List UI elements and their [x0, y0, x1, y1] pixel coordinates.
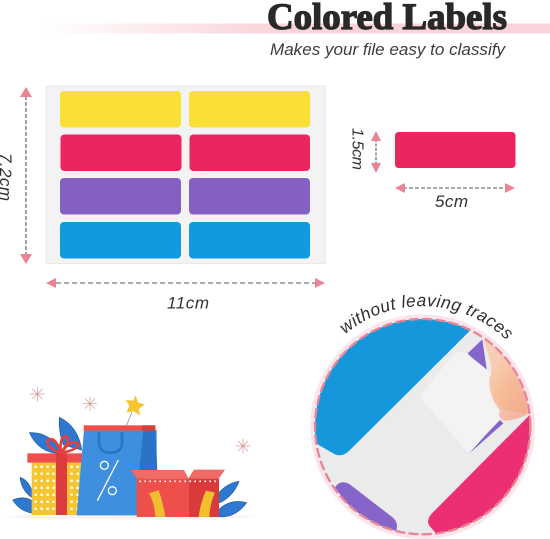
bag rim [84, 425, 155, 431]
height arrow 1.5cm [371, 131, 381, 173]
purple labels [60, 178, 310, 214]
width arrow 11cm [46, 278, 325, 288]
subtitle: Makes your file easy to classify [270, 40, 506, 59]
gift ribbon [56, 453, 67, 515]
width label 11cm: 11cm [167, 294, 209, 312]
height label 1.5cm: 1.5cm [348, 128, 366, 170]
peeling photo [315, 319, 530, 534]
zoom circle detail [310, 294, 535, 539]
percent sign [97, 460, 118, 501]
gift lid [27, 453, 82, 463]
dashed circle [315, 319, 530, 534]
gift bow [48, 436, 78, 453]
circle outer ring [310, 314, 535, 539]
leaves [13, 417, 247, 517]
blue shopping bag [77, 430, 157, 515]
single pink label [395, 132, 516, 168]
width arrow 5cm [395, 183, 515, 193]
height arrow 7.2cm [20, 87, 32, 264]
yellow gift box [32, 463, 82, 515]
purple strip under flap [468, 339, 503, 453]
blue label [315, 319, 470, 456]
finger [483, 340, 533, 421]
yellow labels [60, 91, 310, 128]
pink label [428, 414, 530, 532]
title band [40, 24, 550, 34]
gift illustration [7, 387, 253, 519]
blue labels [60, 222, 310, 258]
bag handle [99, 432, 122, 453]
sparkles [30, 387, 250, 453]
box flaps [131, 470, 188, 478]
pink labels [60, 134, 310, 171]
curved caption: without leaving traces [340, 294, 512, 338]
fingernail [489, 364, 526, 414]
star [126, 395, 145, 416]
star wand [127, 412, 132, 425]
label sheet [46, 86, 326, 264]
bag side panel [139, 430, 157, 470]
polka dots [36, 466, 78, 514]
yellow ribbons [149, 490, 165, 517]
purple label [335, 482, 397, 537]
width label 5cm: 5cm [435, 192, 468, 211]
box dots [139, 479, 218, 484]
peeled flap [470, 356, 500, 437]
ground shadow [7, 514, 253, 519]
red open box [137, 478, 188, 517]
